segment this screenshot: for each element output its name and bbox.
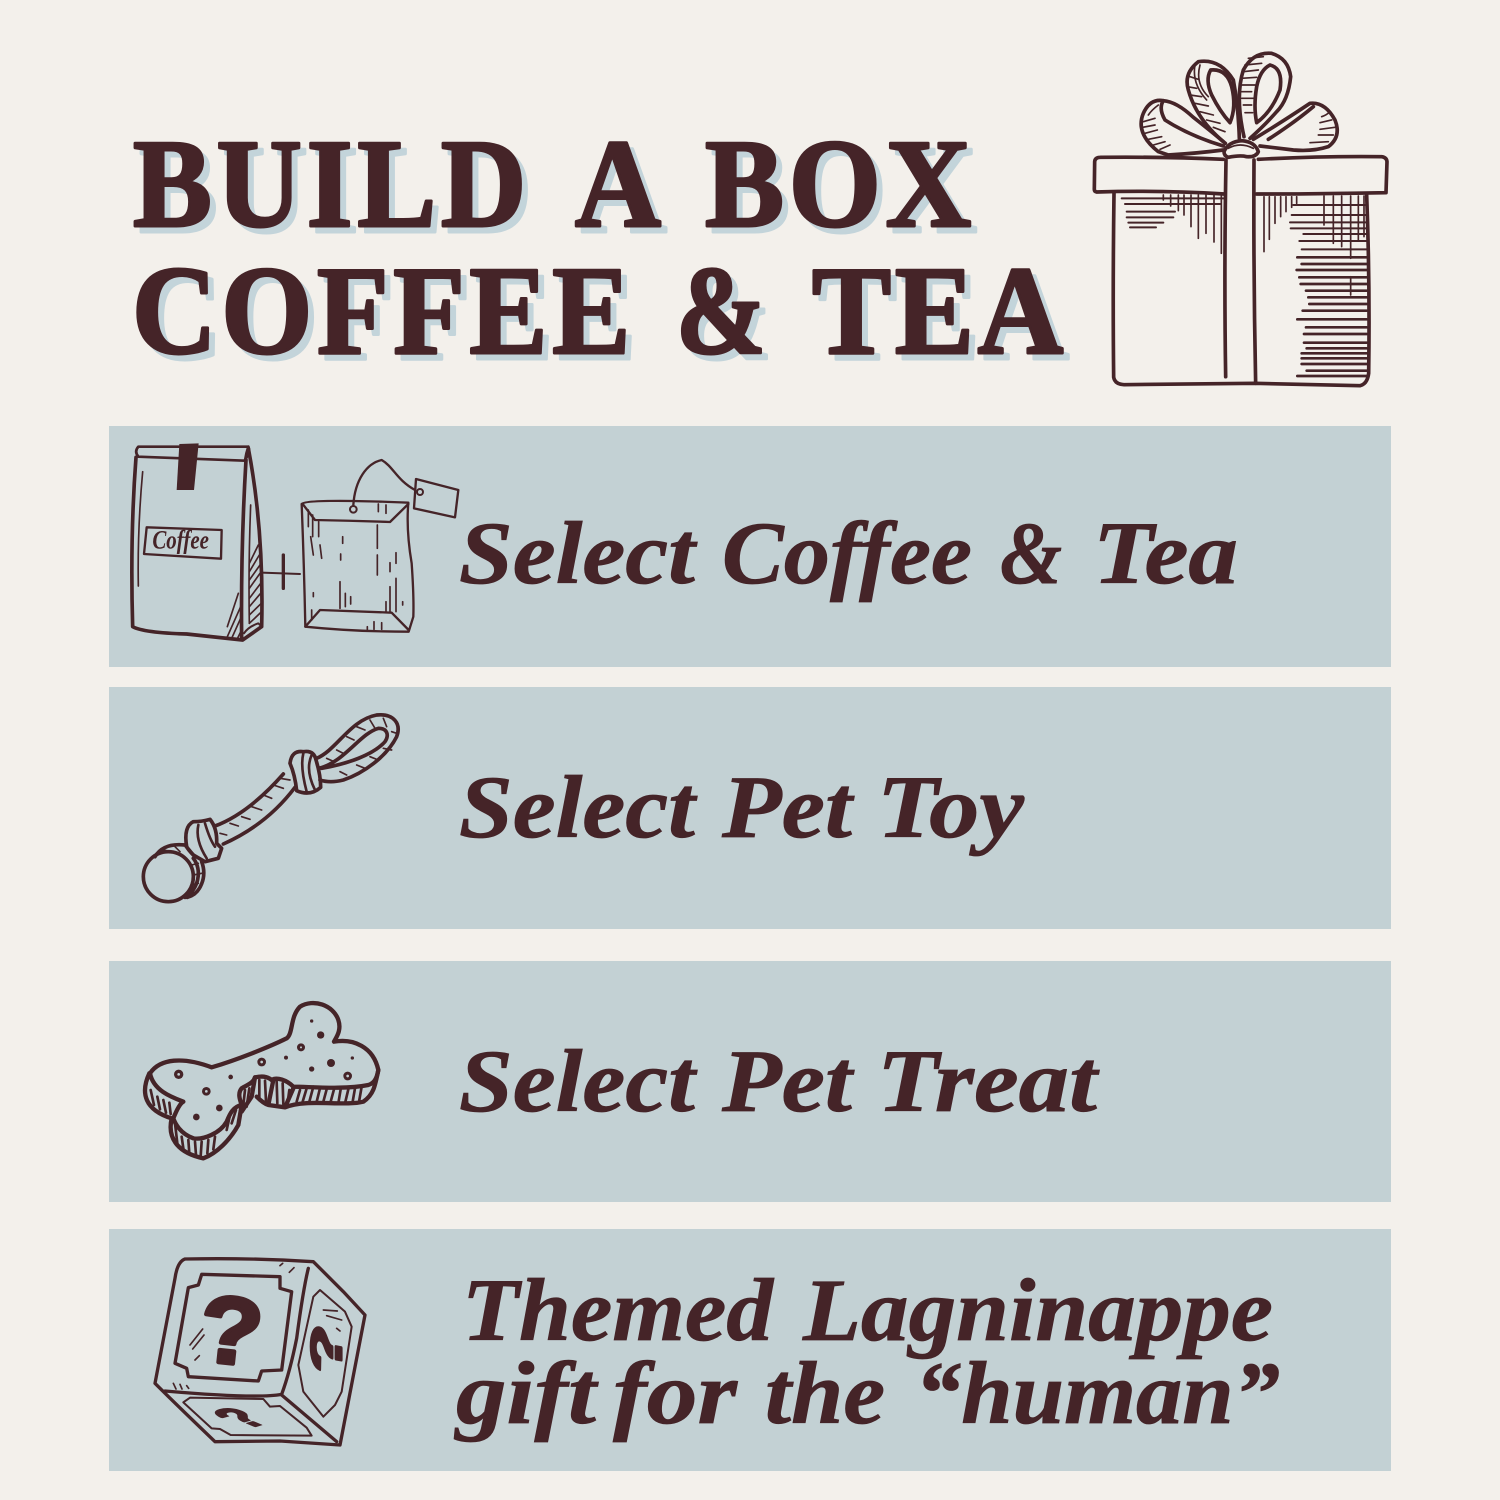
icon text: question marks: ? — [302, 1321, 351, 1378]
text: select coffee and tea: & — [1000, 505, 1062, 603]
icon text: question marks: ? — [197, 1401, 282, 1434]
text: select coffee and tea: Coffee — [722, 505, 972, 603]
text: select pet treat: Pet — [721, 1033, 854, 1131]
panel: pet toy — [109, 687, 1391, 929]
title: TEA — [818, 248, 1073, 387]
title: BOX — [705, 115, 976, 254]
text: gift for the human: “human” — [915, 1345, 1280, 1443]
text: select coffee and tea — [459, 505, 1238, 603]
text: gift for the human: gift — [454, 1345, 599, 1443]
text: gift for the human — [454, 1345, 1280, 1443]
text: themed lagniappe: Lagninappe — [802, 1262, 1273, 1360]
text: gift for the human: the — [765, 1345, 885, 1443]
text: select pet toy: Select — [459, 759, 697, 857]
text: select coffee and tea: Select — [459, 505, 697, 603]
icon: coffee bag and tea bag: Coffee — [152, 525, 209, 554]
text: select pet toy — [459, 759, 1025, 857]
panel: coffee and tea — [109, 426, 1391, 667]
icon: coffee bag and tea bag — [132, 443, 458, 640]
icon: rope toy — [143, 715, 398, 902]
text: themed lagniappe — [462, 1262, 1273, 1360]
title: COFFEE — [132, 242, 635, 381]
title — [132, 115, 1073, 387]
title: A — [575, 115, 661, 254]
panel: themed lagniappe — [109, 1229, 1391, 1471]
hatching, gift box — [1122, 195, 1367, 376]
text: select coffee and tea: Tea — [1093, 505, 1238, 603]
text: select pet treat — [459, 1033, 1100, 1131]
text: themed lagniappe: Themed — [462, 1262, 775, 1360]
icon: mystery cube — [155, 1259, 365, 1445]
icon: gift box — [1094, 53, 1387, 386]
title: COFFEE — [138, 248, 641, 387]
text: gift for the human: for — [613, 1345, 739, 1443]
text: select pet toy: Pet — [721, 759, 854, 857]
text: select pet toy: Toy — [877, 759, 1025, 857]
icon text: question marks: ? — [195, 1274, 268, 1387]
title: BOX — [711, 121, 982, 260]
panel: pet treat — [109, 961, 1391, 1202]
text: select pet treat: Select — [459, 1033, 697, 1131]
icon text: question marks — [195, 1274, 351, 1434]
title: TEA — [812, 242, 1067, 381]
text: select pet treat: Treat — [877, 1033, 1100, 1131]
icon: bitten bone treat — [145, 1003, 378, 1158]
title: & — [676, 242, 766, 381]
title: BUILD — [139, 121, 537, 260]
title: A — [581, 121, 667, 260]
title: BUILD — [133, 115, 531, 254]
title: & — [682, 248, 772, 387]
